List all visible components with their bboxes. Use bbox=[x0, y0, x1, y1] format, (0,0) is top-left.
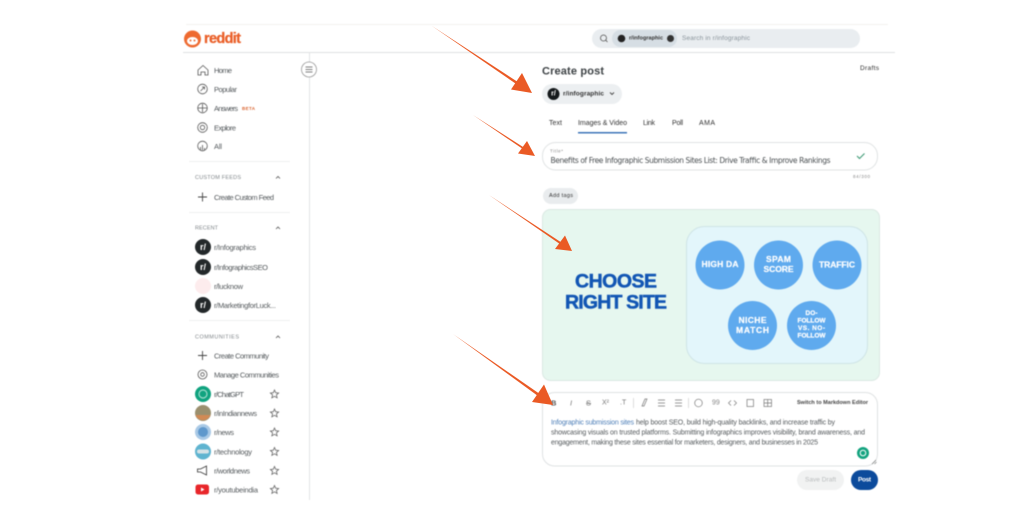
post button bbox=[851, 470, 878, 490]
sidebar: recent communities: r/InfographicsSEO bbox=[214, 263, 268, 272]
sidebar: communities: r/technology bbox=[214, 448, 252, 457]
heading: choose right site bbox=[565, 271, 667, 314]
header: search bar: Search in r/infographic bbox=[682, 35, 751, 42]
icon: grammarly badge bbox=[857, 447, 869, 459]
sidebar: recent communities: r/MarketingforLuck... bbox=[214, 301, 276, 310]
community selector bbox=[542, 84, 622, 104]
header: reddit logo bbox=[184, 30, 241, 48]
image preview panel bbox=[542, 210, 880, 380]
sidebar: recent communities: r/ bbox=[200, 262, 206, 272]
heading: choose right site: CHOOSE bbox=[575, 271, 657, 293]
formatting toolbar: .T bbox=[620, 400, 627, 407]
sidebar: recent communities bbox=[195, 226, 280, 313]
circle: do-follow vs no-follow: DO- bbox=[806, 310, 818, 317]
drafts link: Drafts bbox=[860, 65, 880, 72]
circle: spam score: SCORE bbox=[764, 264, 794, 274]
sidebar: communities: r/youtubeindia bbox=[214, 486, 259, 495]
post type tabs: Text bbox=[549, 120, 562, 127]
sidebar: communities: r/inIndiannews bbox=[214, 409, 257, 418]
body paragraph: engagement, making these sites essential for marketers, designers, and businesses in 2025 bbox=[551, 440, 818, 447]
sidebar: communities: Create Community bbox=[214, 352, 269, 361]
nav item: answers bbox=[198, 103, 256, 113]
arrow: to title input bbox=[473, 115, 535, 156]
header: search bar bbox=[592, 29, 860, 48]
formatting toolbar: S bbox=[586, 399, 591, 408]
body text editor bbox=[542, 392, 878, 466]
header: reddit logo: reddit bbox=[204, 31, 241, 47]
inner card with criteria bbox=[686, 226, 868, 364]
sidebar: communities: r/worldnews bbox=[214, 467, 250, 476]
header: search bar: r/infographic bbox=[629, 36, 663, 42]
post type tabs: Link bbox=[643, 120, 656, 127]
circle: traffic: TRAFFIC bbox=[819, 260, 855, 270]
sidebar: communities: r/news bbox=[214, 428, 234, 437]
circle: do-follow vs no-follow: VS. NO- bbox=[798, 325, 825, 332]
arrow: to text editor bbox=[453, 334, 553, 405]
arrow: to image preview bbox=[489, 195, 572, 251]
save draft button: Save Draft bbox=[805, 477, 836, 484]
nav item: answers: Answers bbox=[214, 104, 238, 113]
circle: niche match: MATCH bbox=[736, 325, 769, 335]
nav item: popular: Popular bbox=[214, 85, 238, 94]
sidebar: recent communities: r/Infographics bbox=[214, 243, 256, 252]
sidebar: recent communities: r/ bbox=[200, 300, 206, 310]
circle: niche match bbox=[728, 301, 777, 350]
body paragraph: Infographic submission sites bbox=[551, 420, 634, 427]
sidebar: recent communities: RECENT bbox=[195, 226, 219, 232]
community selector: r/infographic bbox=[563, 91, 604, 98]
circle: do-follow vs no-follow: FOLLOW bbox=[798, 333, 826, 340]
body paragraph: showcasing visuals on trusted platforms. Submitting infographics improves visibility, brand awareness, and bbox=[551, 430, 865, 437]
save draft button bbox=[797, 470, 844, 490]
sidebar: main navigation bbox=[198, 66, 256, 151]
post type tabs: Poll bbox=[672, 120, 683, 127]
sidebar: recent communities: r/lucknow bbox=[214, 282, 244, 291]
post type tabs: Images & Video bbox=[578, 120, 627, 127]
nav item: home: Home bbox=[214, 66, 232, 75]
sidebar: custom feeds: Create Custom Feed bbox=[214, 193, 274, 202]
favourite stars bbox=[270, 390, 279, 493]
title input: 84/300 bbox=[853, 174, 870, 179]
sidebar toggle button bbox=[302, 62, 316, 77]
body paragraph bbox=[551, 420, 865, 447]
post type tabs bbox=[549, 120, 715, 134]
formatting toolbar: Switch to Markdown Editor bbox=[797, 400, 869, 406]
arrow: to community selector bbox=[432, 26, 532, 93]
circle: traffic bbox=[812, 240, 862, 290]
circle: high da: HIGH DA bbox=[702, 259, 738, 269]
sidebar: custom feeds: CUSTOM FEEDS bbox=[195, 175, 241, 181]
circle: niche match: NICHE bbox=[738, 315, 767, 325]
formatting toolbar: B bbox=[551, 399, 557, 408]
sidebar: communities: Manage Communities bbox=[214, 371, 279, 380]
add tags button bbox=[543, 188, 578, 204]
circle: do-follow vs no-follow: FOLLOW bbox=[798, 318, 826, 325]
circle: spam score: SPAM bbox=[766, 254, 791, 264]
circle: do-follow vs no-follow bbox=[787, 301, 836, 350]
circle: spam score bbox=[754, 240, 803, 290]
heading: choose right site: RIGHT SITE bbox=[565, 292, 667, 314]
heading: create post: Create post bbox=[542, 66, 604, 78]
sidebar: communities bbox=[195, 335, 280, 495]
title input: Title* bbox=[550, 149, 563, 154]
circle: high da bbox=[696, 240, 744, 290]
post type tabs: AMA bbox=[699, 120, 715, 127]
sidebar: communities: COMMUNITIES bbox=[195, 335, 239, 341]
nav item: answers: BETA bbox=[242, 106, 256, 111]
sidebar: recent communities: r/ bbox=[200, 242, 206, 252]
formatting toolbar: I bbox=[570, 399, 572, 408]
formatting toolbar: 99 bbox=[712, 400, 720, 407]
sidebar: custom feeds bbox=[195, 175, 280, 202]
community selector: r/ bbox=[551, 91, 556, 98]
title input bbox=[542, 142, 878, 179]
nav item: all: All bbox=[214, 142, 222, 151]
post button: Post bbox=[858, 477, 872, 484]
body paragraph: help boost SEO, build high-quality backlinks, and increase traffic by bbox=[636, 420, 836, 427]
title input: Benefits of Free Infographic Submission Sites List: Drive Traffic & Improve Rankings bbox=[550, 156, 831, 165]
formatting toolbar bbox=[551, 398, 869, 408]
nav item: explore: Explore bbox=[214, 124, 236, 133]
formatting toolbar: X² bbox=[602, 400, 610, 407]
add tags button: Add tags bbox=[549, 193, 573, 199]
sidebar: communities: r/ChatGPT bbox=[214, 390, 244, 399]
